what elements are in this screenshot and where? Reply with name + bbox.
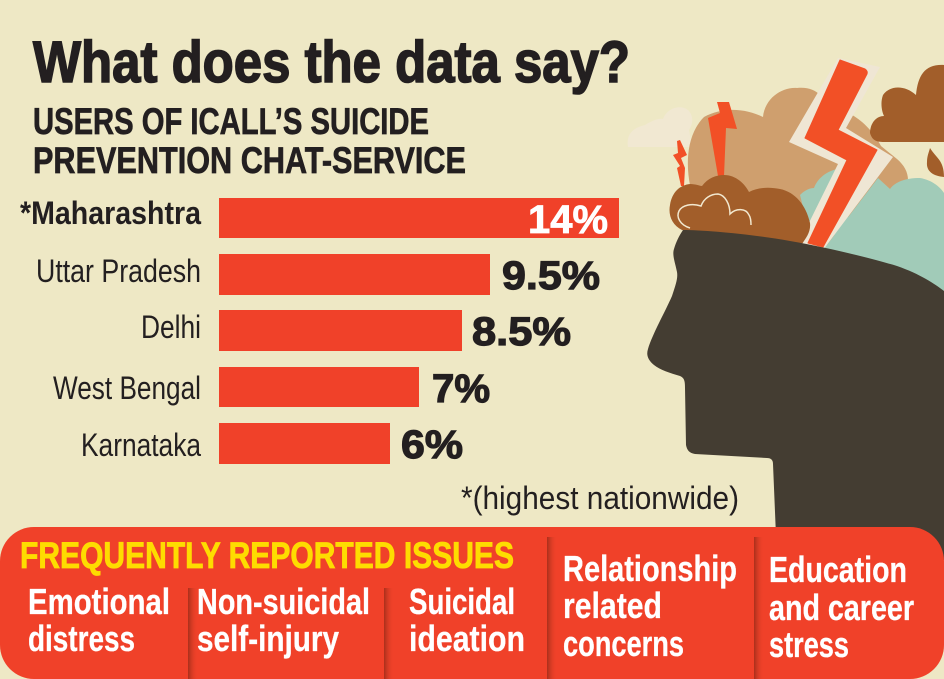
bar chart (20, 195, 619, 467)
title: What does the data say? (33, 30, 630, 95)
bar: West Bengal: 7% (432, 367, 490, 411)
issue: education and career stress (769, 549, 914, 665)
bar: Maharashtra: 14% (528, 198, 608, 242)
icon: teal cloud right (820, 178, 944, 295)
issue: education and career stress: stress (769, 624, 849, 665)
icon: medium lightning bolt (708, 102, 737, 176)
issue: suicidal ideation: ideation (409, 618, 525, 659)
icon: brown cloud front (670, 175, 810, 244)
bar: Uttar Pradesh: 9.5% (502, 254, 600, 298)
icon: large lightning bolt (789, 58, 893, 250)
icon: head silhouette (647, 230, 944, 560)
issue: suicidal ideation: Suicidal (409, 581, 515, 622)
issue: emotional distress: Emotional (28, 581, 170, 622)
issue: suicidal ideation (409, 581, 525, 659)
bar: Karnataka (81, 423, 463, 467)
heading: FREQUENTLY REPORTED ISSUES (20, 535, 514, 576)
issue: non-suicidal self-injury (197, 581, 370, 659)
subtitle (33, 101, 466, 181)
bar: Maharashtra (20, 195, 619, 242)
bar: Uttar Pradesh: Uttar Pradesh (36, 253, 201, 289)
bar: Karnataka: Karnataka (81, 427, 201, 463)
subtitle: USERS OF ICALL’S SUICIDE (33, 101, 429, 142)
issue: relationship related concerns: Relationship (563, 548, 737, 589)
bar: Maharashtra: *Maharashtra (20, 195, 201, 231)
issue: emotional distress (28, 581, 170, 659)
subtitle: PREVENTION CHAT-SERVICE (33, 140, 466, 181)
footnote: *(highest nationwide) (461, 480, 739, 516)
bar: Karnataka: 6% (401, 423, 463, 467)
bar: West Bengal (53, 367, 490, 411)
bar: Uttar Pradesh (36, 253, 600, 298)
bar: Delhi (141, 309, 571, 354)
issue: relationship related concerns: concerns (563, 623, 684, 664)
issue: education and career stress: Education (769, 549, 907, 590)
issue: relationship related concerns: related (563, 585, 662, 626)
icon: cloud outline (678, 194, 751, 228)
issue: relationship related concerns (563, 548, 737, 664)
bar: Delhi: Delhi (141, 309, 201, 345)
issue: non-suicidal self-injury: Non-suicidal (197, 581, 370, 622)
panel: frequently reported issues (0, 527, 944, 679)
bar: West Bengal: West Bengal (53, 370, 201, 406)
issue: non-suicidal self-injury: self-injury (197, 618, 339, 659)
icon: tan cloud (688, 88, 908, 245)
icon: brown cloud right (870, 65, 944, 142)
issue: emotional distress: distress (28, 618, 135, 659)
illustration: head with storm clouds (628, 58, 944, 560)
icon: small lightning bolt (673, 140, 687, 186)
icon: brown rain drop (927, 148, 944, 177)
bar: Delhi: 8.5% (472, 310, 571, 354)
icon: pale cloud (628, 107, 692, 147)
icon: teal cloud left (800, 168, 850, 235)
